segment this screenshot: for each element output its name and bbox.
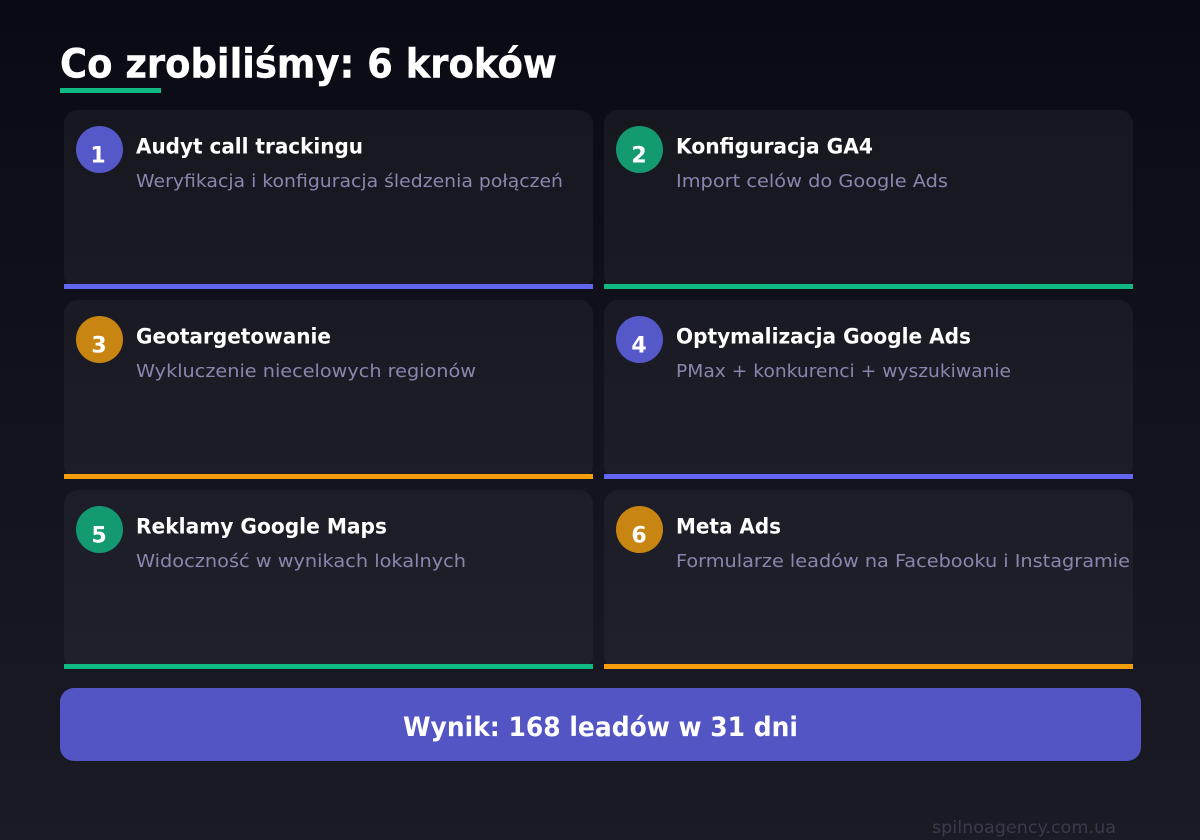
step 5 heading: Reklamy Google Maps xyxy=(136,514,387,538)
step 2 heading: Konfiguracja GA4 xyxy=(676,134,873,158)
icon: number 6: 6 xyxy=(631,524,647,548)
icon: number 5 xyxy=(76,506,123,553)
icon: number 1: 1 xyxy=(90,144,106,168)
step 6 heading: Meta Ads xyxy=(676,514,781,538)
icon: number 2 xyxy=(616,126,663,173)
result text: Wynik: 168 leadów w 31 dni xyxy=(403,712,798,743)
icon: number 3 xyxy=(76,316,123,363)
panel: step 6 xyxy=(604,490,1133,669)
step 3 description: Wykluczenie niecelowych regionów xyxy=(136,361,476,382)
step 1 description: Weryfikacja i konfiguracja śledzenia połączeń xyxy=(136,171,563,192)
icon: number 4: 4 xyxy=(631,334,647,358)
panel: step 5 xyxy=(64,490,593,669)
icon: number 1 xyxy=(76,126,123,173)
panel: step 2 xyxy=(604,110,1133,289)
icon: number 6 xyxy=(616,506,663,553)
step 1 heading: Audyt call trackingu xyxy=(136,134,363,158)
icon: number 3: 3 xyxy=(91,334,107,358)
step 4 description: PMax + konkurenci + wyszukiwanie xyxy=(676,361,1011,382)
step 4 heading: Optymalizacja Google Ads xyxy=(676,324,971,348)
panel: step 3 xyxy=(64,300,593,479)
icon: number 5: 5 xyxy=(91,524,107,548)
title: Co zrobiliśmy: 6 kroków xyxy=(60,42,557,88)
panel: step 4 xyxy=(604,300,1133,479)
icon: number 2: 2 xyxy=(631,144,647,168)
step 5 description: Widoczność w wynikach lokalnych xyxy=(136,551,466,572)
title underline xyxy=(60,88,161,93)
icon: number 4 xyxy=(616,316,663,363)
step 3 heading: Geotargetowanie xyxy=(136,324,331,348)
step 6 description: Formularze leadów na Facebooku i Instagramie xyxy=(676,551,1130,572)
footer source: spilnoagency.com.ua xyxy=(932,818,1116,838)
result banner xyxy=(60,688,1141,761)
step 2 description: Import celów do Google Ads xyxy=(676,171,948,192)
panel: step 1 xyxy=(64,110,593,289)
